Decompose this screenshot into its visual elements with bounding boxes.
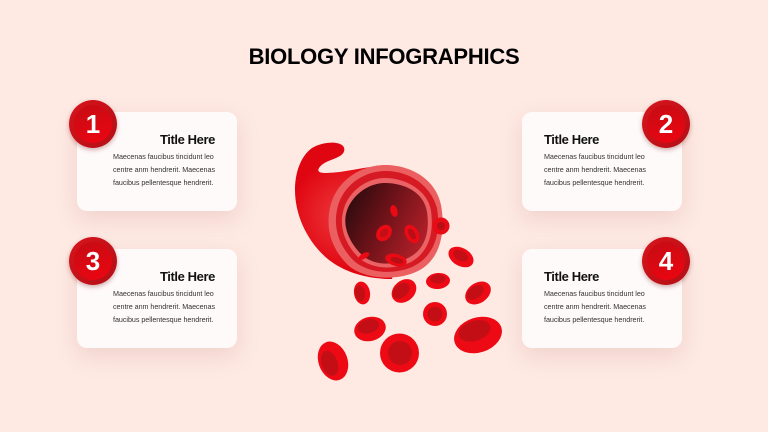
badge 3: 3 [86,246,100,276]
title: BIOLOGY INFOGRAPHICS [249,44,519,69]
badge 1: 1 [86,109,100,139]
cell 8 [380,334,419,372]
panel: card 2 [522,112,682,211]
card 3 text: faucibus pellentesque hendrerit. [113,315,213,324]
badge 3 [69,237,117,285]
card 3 text: centre anm hendrerit. Maecenas [113,302,215,311]
card 4 text: Maecenas faucibus tincidunt leo [544,289,645,298]
cell 1 [445,242,477,272]
cell 3 [352,280,372,306]
cell 6 [423,302,447,326]
vessel inner wall [342,178,432,267]
panel: card 4 [522,249,682,348]
cell in vessel 3 [401,222,423,246]
card 1 text [113,152,215,187]
card 3 heading: Title Here [160,269,215,284]
cell in vessel 5 [357,251,371,261]
vessel outer body [295,143,400,279]
cell 7 [351,313,389,345]
card 2 text: Maecenas faucibus tincidunt leo [544,152,645,161]
vessel [295,143,450,279]
cell 9 [449,311,507,359]
badge 4: 4 [659,246,673,276]
card 1 text: Maecenas faucibus tincidunt leo [113,152,214,161]
blood cells [313,242,507,385]
card 4 text [544,289,646,324]
badge 2: 2 [659,109,673,139]
cell in vessel 1 [389,204,399,218]
card 1 text: centre anm hendrerit. Maecenas [113,165,215,174]
vessel middle wall [336,171,438,272]
card 1 heading: Title Here [160,132,215,147]
card 3 text: Maecenas faucibus tincidunt leo [113,289,214,298]
vessel outer rim [329,165,443,278]
cell 4 [387,274,421,308]
card 4 text: faucibus pellentesque hendrerit. [544,315,644,324]
panel: card 1 [77,112,237,211]
card 2 text: centre anm hendrerit. Maecenas [544,165,646,174]
cell on rim [432,218,450,234]
cell in vessel 2 [373,222,395,244]
badge 1 [69,100,117,148]
badge 2 [642,100,690,148]
vessel lumen [345,183,428,264]
cell in vessel 4 [384,251,408,269]
panel: card 3 [77,249,237,348]
badge 4 [642,237,690,285]
card 2 heading: Title Here [544,132,599,147]
card 2 text [544,152,646,187]
card 3 text [113,289,215,324]
cell 2 [425,272,451,290]
card 4 text: centre anm hendrerit. Maecenas [544,302,646,311]
card 1 text: faucibus pellentesque hendrerit. [113,178,213,187]
card 4 heading: Title Here [544,269,599,284]
cell 10 [313,337,353,385]
card 2 text: faucibus pellentesque hendrerit. [544,178,644,187]
cell 5 [461,277,495,309]
